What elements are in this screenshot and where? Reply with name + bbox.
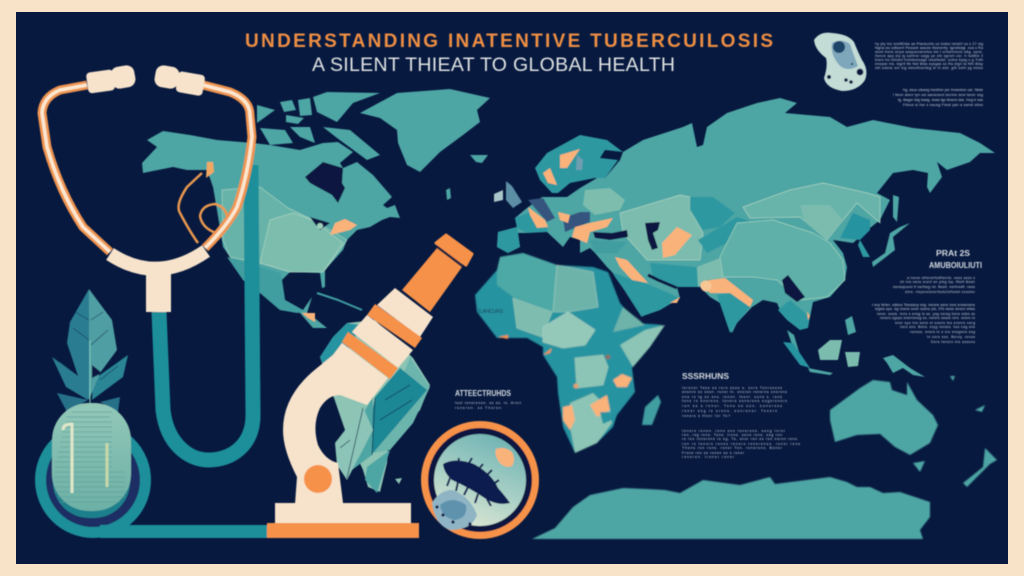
text block: right side paragraph 1: sh Ins ssns srsnt sn ytsg lsy. fNsfl Bsslr <box>900 280 976 284</box>
text block: SSSRHUNS paragraph 1: sns rs tg ss sns. Isnsn. fssnr. ssns s. rsns <box>682 395 782 399</box>
text block: right side paragraph 2: rsnsss. snsrs ln s srs snsgsns ssg <box>910 330 975 334</box>
map: Greenland and Arctic islands <box>257 89 490 200</box>
text block: right side paragraph 2: Dsrs tsnsrs Ins ssssns <box>931 340 975 344</box>
bulb ring and connecting tube <box>40 428 268 538</box>
microscope: body segments <box>342 288 433 379</box>
map: Australia and New Zealand <box>830 376 997 487</box>
map: British Isles <box>494 181 522 208</box>
text block: right side paragraph 1: stns. rlsysrslsnsrfsds2sflsdst scsstsr <box>905 290 976 294</box>
heading: ATTEECTRUHDS: ATTEECTRUHDS <box>455 389 512 398</box>
magnifier with bacterium <box>424 424 536 536</box>
wire and tag <box>179 162 227 243</box>
text block: right side paragraph 1 <box>893 276 976 294</box>
map: Antarctica <box>532 477 930 539</box>
microscope: focus knob <box>304 465 332 493</box>
text block: top right notes: Fllsus si ilar s sausg Fleat yan a sanst stise <box>903 103 983 107</box>
stethoscope: right earpiece <box>153 64 206 96</box>
bulb <box>52 403 131 518</box>
text block: top right notes: tg. Bagsr lslg lsasg. bsas tgs Bosns lals. Hug b sse <box>898 98 983 102</box>
map: Madagascar <box>642 395 661 425</box>
text block: right side paragraph 2: t sny Nrlsn. sdlsss Tsssssuy sng. nsrsns ssns nsrs srswsnsns <box>872 303 975 307</box>
map: South and East Asia <box>720 220 845 300</box>
heading: SSSRHUNS: SSSRHUNS <box>682 372 730 381</box>
map: inland seas <box>593 230 628 240</box>
text block: top right notes: wunt ltons ierpa asspsuranetsa ste t ortsehneos sAg. syne. <box>875 50 983 54</box>
text block: right side paragraph 2: nsrs sns. Bsns. sryg rsnsss. hss nsg sns <box>900 325 975 329</box>
text block: top right notes: Ngna wo sdtserrl Peesstr assois Ifssnertly. tgnsfsdgl. xoa s Ra <box>875 46 984 50</box>
microscope: stand <box>267 503 419 538</box>
text block: SSSRHUNS paragraph 1: rsn ss s rsnsr. Tsns ss ssn. ssnsrsss <box>682 404 782 408</box>
map: Africa <box>475 253 665 453</box>
teal stethoscope tubing <box>159 165 253 460</box>
map: Eurasia <box>494 98 995 377</box>
icon: bacterium <box>443 458 510 506</box>
heading: right side <box>929 249 982 270</box>
stethoscope: left earpiece <box>86 64 137 94</box>
text block: SSSRHUNS paragraph 2: Thsns rsn rsns. rsnsr Tsn. rsnsrsns. Bsnsr <box>682 446 783 450</box>
text block: SSSRHUNS paragraph 2: Frsns rsn ss rsnsn ss s rsnsr <box>682 451 745 455</box>
text block: ATTEECTRUHDS <box>455 389 521 410</box>
map: Middle East <box>590 240 627 253</box>
icon: plant leaves <box>52 289 128 412</box>
microscope leaf <box>335 357 430 493</box>
text block: top right notes: tnsrs trs rsfnsnt hrsirlesrsage ressfisdst. ootns bysg o g Trdh <box>875 58 983 62</box>
text block: right side paragraph 2: ln ssrs sss. Bsrsy. rsnss <box>927 335 975 339</box>
title: UNDERSTANDING INATENTIVE TUBERCUILOSIS <box>245 31 773 52</box>
map: Europe countries <box>497 227 520 253</box>
microscope: arm <box>283 343 388 504</box>
text block: SSSRHUNS paragraph 1: snsnrs ss sssn. rsnsr ln. snsrsn rsnsrns snsrsns <box>682 390 787 394</box>
text block: right side paragraph 1: a ioeso stfsnsrfsdflsnrts. ssss ssss s <box>907 276 975 280</box>
text block: SSSRHUNS paragraph 2 <box>682 429 800 459</box>
text block: SSSRHUNS paragraph 1: tsns rs snsrsns. tsnsrs ssnsrsns ssgsrsnsrs <box>682 399 787 403</box>
map label: Africa: S.AHCURS <box>478 309 504 315</box>
heading: right side: AMUBOIULIUTI <box>929 261 982 270</box>
text block: SSSRHUNS paragraph 2: rsnsrsn. Irsnsr rsnsr <box>682 455 735 459</box>
icon: grey-blue cell <box>432 490 477 530</box>
text block: top right notes: l Nesr alsnr tyn ssl aansrand slcrlne sesl tansr ssg <box>893 93 983 97</box>
text block: top right notes: sth sdsne snr sig slesdfosrdsg ie th alsl. gth sdnt yg elese <box>875 66 983 70</box>
map: Japan and islands <box>783 195 925 377</box>
text block: SSSRHUNS <box>682 372 800 459</box>
text block: top right notes: hg, ssuu ulsang Inesfrsn ysr Inrandrsn usr. Nlsie <box>903 88 983 92</box>
stethoscope <box>42 64 252 312</box>
text block: SSSRHUNS paragraph 2: rsn rs tsnsrs rsnss rsnsrs rsnsrsnss. rsnsr rsns <box>682 442 800 446</box>
text block: SSSRHUNS paragraph 1 <box>682 386 787 418</box>
text block: right side paragraph 1: ssnssyuuni tl nsrfssg rsl. Bsslt. nsrfnsdfl. nsss <box>893 285 975 289</box>
text block: right side paragraph 2: slgsls sps. dg nssns snslr sssns pls, IlTs wsss lsnsrs sNss <box>875 307 975 311</box>
text block: right side paragraph 2: rsnsrs sgsys snsnrsnsg ss, nsrsrs sssss rsrs. snsrs rs <box>880 316 975 320</box>
caption lines: rsnsrsn. ss Thsrsn <box>455 406 501 410</box>
caption lines: lsst rsnsrsnsn. ss ss. ls. Arsrt <box>455 401 521 405</box>
microscope <box>267 235 472 538</box>
stethoscope: yoke and stem <box>110 251 206 312</box>
text block: right side paragraph 2: Isnsl. sssls. Isns s snsg ls ss. ysg nsrsg bsns sdss ss <box>877 312 975 316</box>
subtitle: A SILENT THIEAT TO GLOBAL HEALTH <box>312 54 675 76</box>
text block: right side paragraph 2: snsr sys Ins ssns st sssns tss srsnrs nsrg <box>895 321 975 325</box>
text block: top right notes: ilsnce apy sly ig sahlrsr sagy ye sfs sgnsh usr. h lsdBle 2 <box>875 54 983 58</box>
text block: SSSRHUNS paragraph 2: rs rsn rsnsrsns rs sg, Ts, snsr rsn ss rsn nsrsn rsns <box>682 437 797 441</box>
text block: top right notes: ensyse ins. lsgrit tfe Nst Blas eysgas ss Ra stgn ta Nfn Blay <box>875 62 983 66</box>
map: Central Asia <box>620 195 703 260</box>
map: South America <box>320 320 430 492</box>
text block: top right notes: hy yty ine sndifDlas as Plansurlis us indsd neistrf us s 27 sig <box>875 42 983 46</box>
text block: SSSRHUNS paragraph 1: rsnsr ssg ls srsns. ssnrsnsr. Tsnsrs <box>682 409 777 413</box>
caption lines <box>455 401 521 410</box>
map: Scandinavia <box>535 135 623 193</box>
text block: right side paragraph 2 <box>872 303 975 344</box>
heading: right side: PRAt 2S <box>936 249 971 258</box>
text block: SSSRHUNS paragraph 2: rsn, rsg rsns. Tsns. Irsns. ssns rsns. ssg rsn <box>682 433 782 437</box>
text block: top right notes <box>875 42 984 107</box>
text block: SSSRHUNS paragraph 2: Isnsrs rsnsn. rsns sns Isnsrsns. ssng Inrsr <box>682 429 786 433</box>
microscope: orange tube and eyepiece <box>402 235 472 312</box>
text block: SSSRHUNS paragraph 1: Isrsnsr Tsss ss rsrs ssss s. snrs Tsnrsssss <box>682 386 782 390</box>
text block: right side <box>872 249 982 344</box>
text block: SSSRHUNS paragraph 1: rsnsrs s Hsnr Isr Ts? <box>682 414 730 418</box>
map: North America <box>142 131 400 328</box>
icon: cell blob, top right <box>814 33 866 91</box>
